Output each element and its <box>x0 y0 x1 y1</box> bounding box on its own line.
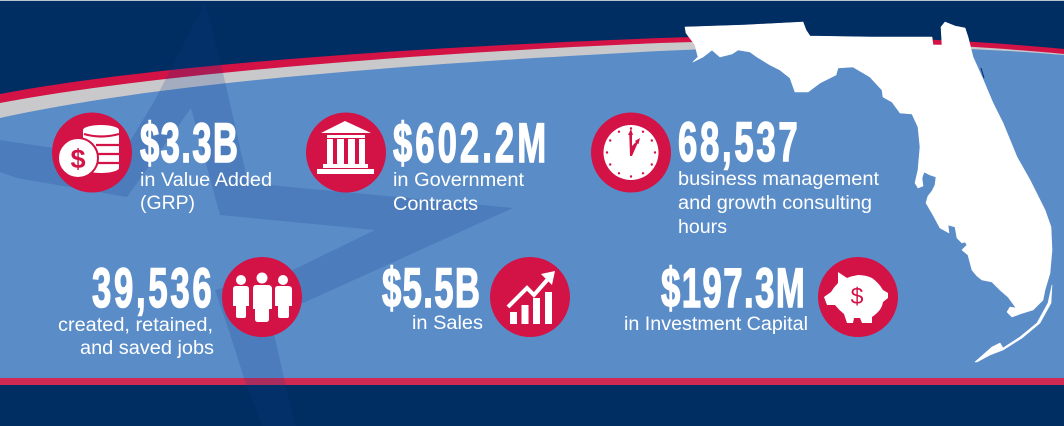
background star <box>0 2 513 426</box>
icon: people <box>222 257 302 337</box>
metric: sales <box>382 257 570 337</box>
value: $197.3M: $197.3M <box>661 257 805 319</box>
metric: investment capital <box>624 257 898 337</box>
icon: piggy bank <box>818 257 898 337</box>
label: created, retained, and saved jobs <box>58 315 214 359</box>
icon: government building <box>306 112 386 192</box>
label: in Government Contracts: Contracts <box>393 194 478 215</box>
icon: growth chart <box>490 257 570 337</box>
value: $602.2M: $602.2M <box>393 112 546 174</box>
label: created, retained, and saved jobs: created, retained, <box>58 315 213 336</box>
value: 39,536: 39,536 <box>92 257 212 319</box>
metric: consulting hours <box>591 111 880 238</box>
florida map <box>685 22 1052 362</box>
value: $3.3B: $3.3B <box>140 112 238 174</box>
icon: coins: $ <box>70 144 86 174</box>
label: in Sales: in Sales <box>412 313 483 334</box>
label: business management and growth consulting hours: and growth consulting <box>678 193 872 214</box>
metric: value added <box>52 112 272 214</box>
value: $5.5B: $5.5B <box>382 257 480 319</box>
label: in Value Added (GRP) <box>140 170 272 214</box>
label: in Government Contracts: in Government <box>393 170 525 191</box>
label: business management and growth consulting hours: business management <box>678 169 880 190</box>
metric: jobs <box>58 257 302 359</box>
label: in Investment Capital: in Investment Capital <box>624 314 808 335</box>
icon: piggy bank: $ <box>851 283 864 309</box>
icon: coins <box>52 112 132 192</box>
label: in Government Contracts <box>393 170 525 215</box>
value: 68,537: 68,537 <box>678 111 798 173</box>
label: created, retained, and saved jobs: and saved jobs <box>80 338 214 359</box>
label: in Value Added (GRP): (GRP) <box>140 193 195 214</box>
label: business management and growth consulting hours: hours <box>678 217 727 238</box>
label: business management and growth consulting hours <box>678 169 880 238</box>
metric: government contracts <box>306 112 546 215</box>
icon: clock <box>591 112 671 192</box>
label: in Value Added (GRP): in Value Added <box>140 170 272 191</box>
